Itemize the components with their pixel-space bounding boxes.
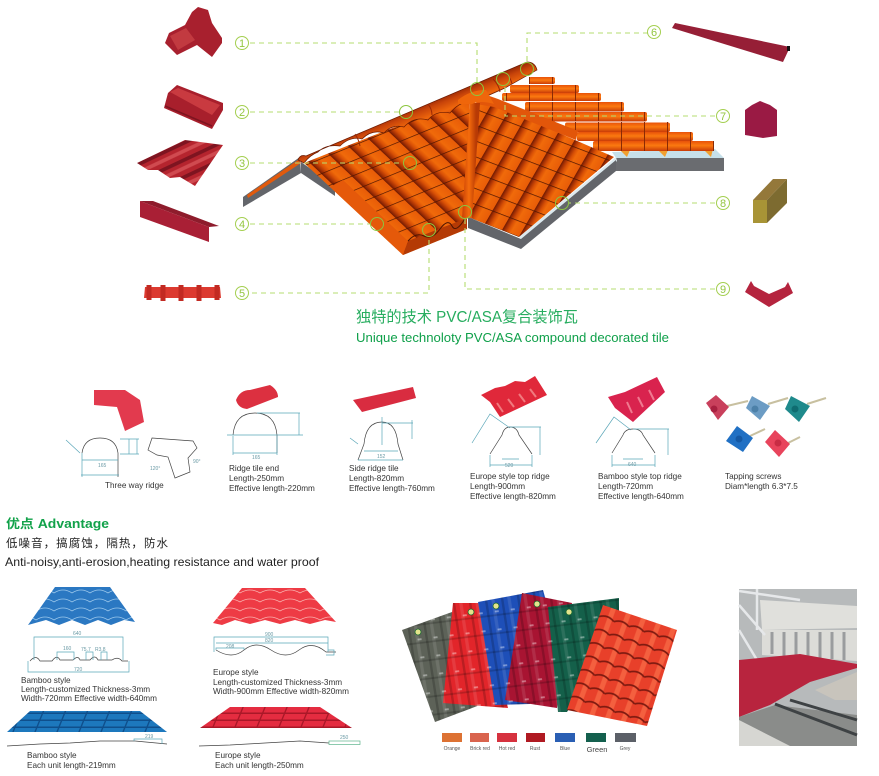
eave scallops — [408, 217, 466, 241]
left barge board — [330, 180, 408, 255]
tapping screws caption — [725, 472, 798, 491]
mould block — [762, 630, 857, 661]
right eave strip — [519, 157, 617, 240]
left slope tiles — [304, 102, 470, 255]
rust red sheet — [505, 593, 572, 708]
leader 4 — [250, 223, 370, 225]
side ridge tile icon — [353, 387, 416, 412]
panel: accessories row — [66, 376, 826, 501]
bamboo panel caption: Each unit length-219mm — [27, 761, 116, 770]
heading: Chinese title: 独特的技术 PVC/ASA复合装饰瓦 — [356, 308, 578, 326]
Europe sheet caption: Europe style — [213, 668, 259, 677]
bamboo sheet caption: Length-customized Thickness-3mm — [21, 685, 150, 694]
brick red sheet — [443, 603, 508, 708]
accessory: three way ridge — [66, 390, 201, 490]
back roof underlay strip — [612, 149, 724, 158]
front red tile sheet — [567, 605, 677, 726]
leader 6 — [527, 33, 648, 62]
lower rollers — [815, 672, 857, 700]
Europe sheet profile drawing: 900 — [265, 632, 274, 638]
right slope fascia — [468, 160, 616, 249]
part 5: tile strip — [144, 285, 221, 301]
Europe top ridge caption — [470, 472, 556, 501]
bamboo top ridge caption: Bamboo style top ridge — [598, 472, 682, 481]
colour swatches — [442, 733, 636, 754]
swatch: hot red: Hot red — [499, 746, 515, 752]
Europe top ridge drawing: 520 — [505, 463, 514, 469]
swatch: grey: Grey — [620, 746, 631, 752]
part 4: side flashing — [140, 201, 219, 242]
number 5 — [236, 286, 248, 300]
side ridge tile caption: Side ridge tile — [349, 464, 399, 473]
Europe panel caption — [215, 751, 304, 770]
swatch: orange: Orange — [444, 746, 461, 752]
Europe sheet profile drawing — [214, 632, 336, 655]
sheet labels — [415, 601, 572, 635]
leader 7 — [505, 86, 715, 116]
grey sheet — [402, 612, 480, 722]
bamboo panel image — [7, 711, 167, 732]
three way ridge side view: 120° — [150, 466, 160, 472]
swatch: blue: Blue — [560, 746, 570, 752]
valley ridge — [462, 103, 480, 218]
Europe flat panel — [199, 707, 360, 770]
bamboo top ridge drawing: 640 — [628, 462, 637, 468]
swatch: green: Green — [587, 745, 607, 754]
photo: production line — [739, 589, 857, 746]
number 9: 9 — [720, 284, 726, 296]
target circles — [370, 62, 568, 236]
screw: teal — [785, 396, 826, 422]
number 2 — [236, 106, 248, 119]
tapping screws caption: Diam*length 6.3*7.5 — [725, 482, 798, 491]
part 6: long ridge — [672, 23, 790, 62]
accessory: ridge tile end — [227, 385, 315, 493]
Europe top ridge caption: Effective length-820mm — [470, 492, 556, 501]
part 2: ridge cap tile — [164, 85, 223, 129]
number 5: 5 — [239, 288, 245, 300]
leader lines and target circles — [250, 33, 715, 293]
number 8 — [716, 196, 730, 210]
steel frame — [739, 589, 800, 660]
side ridge tile caption — [349, 464, 435, 493]
number 3 — [236, 156, 248, 170]
Europe panel profile — [199, 735, 360, 746]
number 4: 4 — [239, 219, 245, 231]
part 9: valley gutter — [745, 281, 793, 307]
leader 3 — [250, 162, 403, 164]
number 2: 2 — [239, 107, 245, 119]
accessory: tapping screws — [706, 395, 826, 491]
red sheet — [739, 654, 857, 717]
leader 5 — [252, 237, 429, 293]
upper mould rollers — [760, 600, 857, 630]
number 1 — [236, 36, 248, 50]
leader 8 — [569, 202, 715, 204]
three way ridge side view: 90° — [193, 459, 201, 465]
Europe top ridge caption: Europe style top ridge — [470, 472, 550, 481]
screw: light blue — [746, 396, 788, 420]
side ridge tile caption: Effective length-760mm — [349, 484, 435, 493]
bamboo panel caption: Bamboo style — [27, 751, 77, 760]
ridge tile end icon — [236, 385, 278, 409]
part 1: three way ridge — [165, 7, 222, 57]
right slope tiles — [468, 104, 614, 237]
three way ridge side view — [148, 438, 201, 478]
part 3: corrugated sheet — [137, 140, 223, 186]
Europe sheet profile drawing: 820 — [265, 638, 274, 644]
panel: roof sheet specifications — [7, 587, 360, 770]
swatch: orange — [442, 733, 462, 752]
Europe sheet caption: Length-customized Thickness-3mm — [213, 678, 342, 687]
Europe sheet image — [213, 588, 336, 625]
swatch: brick red — [470, 733, 490, 752]
accessory: side ridge tile — [349, 387, 435, 493]
ridge tile end caption: Effective length-220mm — [229, 484, 315, 493]
back roof fascia — [616, 158, 724, 171]
bamboo top ridge icon — [608, 377, 665, 422]
bamboo sheet image — [28, 587, 135, 625]
bamboo sheet profile drawing: 720 — [74, 667, 83, 673]
bamboo sheet profile drawing: R3.8 — [95, 647, 106, 653]
bamboo panel caption — [27, 751, 116, 770]
number 7: 7 — [720, 111, 726, 123]
advantage heading: 优点 Advantage — [6, 516, 109, 531]
ridge cap joints — [355, 72, 512, 146]
bamboo panel profile: 219 — [145, 734, 154, 740]
swatch: green — [586, 733, 607, 754]
bamboo sheet caption: Width-720mm Effective width-640mm — [21, 694, 157, 703]
back roof battens — [620, 149, 713, 157]
panel: exploded roof diagram — [137, 7, 793, 307]
advantage Chinese text: 低噪音，搞腐蚀，隔热，防水 — [6, 536, 168, 550]
leader 2 — [250, 111, 399, 113]
bamboo sheet profile drawing: 640 — [73, 631, 82, 637]
Europe sheet — [213, 588, 349, 696]
accessory: bamboo style top ridge — [596, 377, 684, 501]
number 6: 6 — [651, 27, 657, 39]
bamboo sheet profile drawing — [28, 631, 129, 673]
ridge tile end caption: Ridge tile end — [229, 464, 280, 473]
three way ridge caption: Three way ridge — [105, 481, 164, 490]
bamboo flat panel — [7, 711, 167, 770]
tapping screws caption: Tapping screws — [725, 472, 781, 481]
swatch: rust: Rust — [530, 746, 541, 752]
left gable tile edge — [247, 160, 301, 198]
swatch: blue — [555, 733, 575, 752]
panel: colour sample sheets — [402, 590, 677, 754]
panel: advantage text — [5, 516, 320, 569]
three way junction — [458, 90, 494, 104]
photo background — [739, 589, 857, 746]
Europe panel caption: Europe style — [215, 751, 261, 760]
bamboo top ridge caption — [598, 472, 684, 501]
blue sheet — [478, 590, 550, 705]
roof illustration — [243, 62, 724, 255]
ridge tile end caption — [229, 464, 315, 493]
Europe top ridge icon — [481, 376, 547, 417]
ridge tile end caption: Length-250mm — [229, 474, 284, 483]
part 8: wooden batten — [753, 179, 787, 223]
screw: red — [765, 430, 800, 457]
Europe panel caption: Each unit length-250mm — [215, 761, 304, 770]
bamboo sheet profile drawing: 75.7 — [81, 647, 91, 653]
green sheet — [548, 598, 619, 712]
Europe sheet caption — [213, 668, 349, 696]
left gable — [243, 157, 301, 207]
Europe panel profile: 250 — [340, 735, 349, 741]
lower machine bed — [739, 700, 857, 746]
three way ridge icon — [94, 390, 144, 431]
leader 1 — [250, 43, 477, 82]
side ridge tile drawing: 152 — [377, 454, 386, 460]
number 6 — [648, 26, 660, 39]
swatch: brick red: Brick red — [470, 746, 490, 752]
heading: English title: Unique technoloty PVC/ASA compound decorated tile — [356, 330, 669, 345]
left slope fascia — [301, 162, 335, 196]
number 9 — [716, 282, 730, 296]
number 1: 1 — [239, 38, 245, 50]
right hip ridge — [476, 92, 578, 140]
swatch: rust — [526, 733, 545, 752]
bamboo sheet profile drawing: 160 — [63, 646, 72, 652]
bamboo sheet caption — [21, 676, 157, 703]
accessory: Europe style top ridge — [470, 376, 556, 501]
number 7 — [716, 110, 730, 123]
part 7: ridge tile end — [745, 101, 777, 138]
swatch: grey — [615, 733, 636, 752]
bamboo sheet — [21, 587, 157, 703]
bamboo panel profile — [7, 734, 167, 746]
screw: crimson — [706, 395, 748, 420]
Europe sheet caption: Width-900mm Effective width-820mm — [213, 687, 349, 696]
swatch: hot red — [497, 733, 517, 752]
Europe sheet profile drawing: 208 — [226, 644, 235, 650]
number 3: 3 — [239, 158, 245, 170]
number 8: 8 — [720, 198, 726, 210]
main ridge — [298, 62, 537, 163]
three way ridge drawing: 165 — [98, 463, 107, 469]
callout numbers — [236, 26, 730, 300]
screw: blue — [726, 426, 765, 452]
bamboo top ridge caption: Length-720mm — [598, 482, 653, 491]
eave tile ends — [403, 218, 467, 255]
back roof tile rows — [502, 77, 714, 151]
side ridge tile caption: Length-820mm — [349, 474, 404, 483]
bamboo sheet caption: Bamboo style — [21, 676, 71, 685]
ridge tile end drawing: 165 — [252, 455, 261, 461]
leader 9 — [465, 219, 715, 289]
bamboo top ridge caption: Effective length-640mm — [598, 492, 684, 501]
number 4 — [236, 218, 248, 231]
advantage English text: Anti-noisy,anti-erosion,heating resistance and water proof — [5, 555, 320, 569]
Europe panel image — [200, 707, 352, 728]
Europe top ridge caption: Length-900mm — [470, 482, 525, 491]
